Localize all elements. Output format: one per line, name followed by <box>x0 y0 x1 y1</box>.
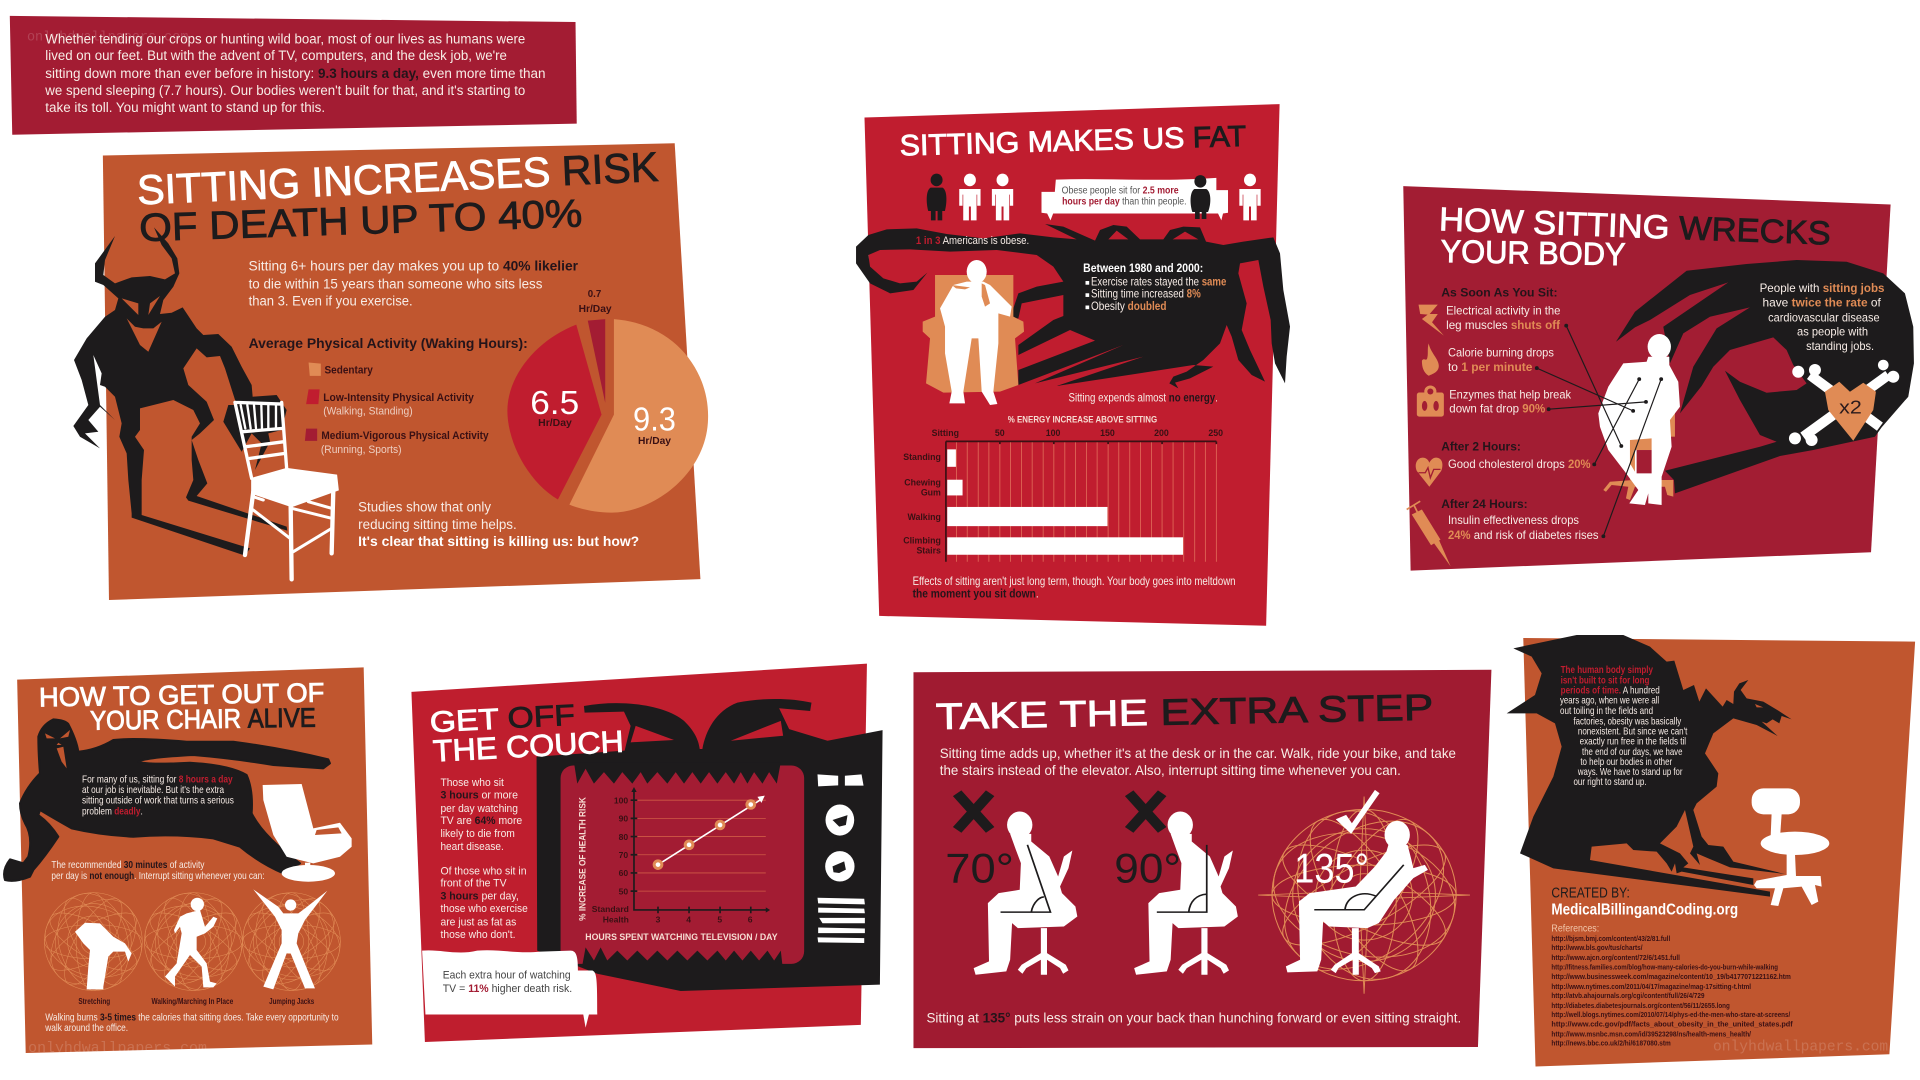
pie chart: Hr/Day <box>579 304 612 315</box>
legend: (Walking, Standing) <box>323 406 413 418</box>
text: human body: isn't built to sit for long <box>1561 675 1649 686</box>
bar chart: energy increase: Standing <box>903 452 941 462</box>
degree labels: 135° <box>1294 844 1369 891</box>
text: sitting time adds up <box>940 745 1456 778</box>
text: as soon as you sit: to 1 per minute <box>1448 360 1533 374</box>
icon: jumping jack figure <box>233 883 350 1001</box>
text: three hours: Those who sit <box>440 777 504 789</box>
legend <box>305 362 489 456</box>
text: references: http://www.ajcn.org/content/72/6/1451.full <box>1551 953 1680 962</box>
title: chair alive <box>39 678 325 736</box>
text: created by: CREATED BY: <box>1551 886 1630 902</box>
text: thirty minutes: The recommended 30 minutes of activity <box>51 860 205 871</box>
line chart: health risk: Standard <box>592 904 629 914</box>
text: references: http://fitness.families.com/blog/how-many-calories-do-you-burn-while-walking <box>1551 963 1778 972</box>
text: as soon as you sit <box>1441 285 1572 416</box>
text: as soon as you sit: Calorie burning drops <box>1448 345 1554 359</box>
line chart: health risk: 90 <box>619 814 628 824</box>
legend: (Running, Sports) <box>321 444 402 456</box>
pie chart: Hr/Day <box>638 436 671 447</box>
title: risk of death: SITTING INCREASES RISK <box>136 143 659 213</box>
conclusion text: Studies show that only <box>358 499 491 514</box>
text: human body: periods of time. A hundred <box>1561 685 1660 696</box>
callout: white couch: Each extra hour of watching <box>443 969 571 981</box>
text: between 1980 and 2000: Exercise rates stayed the same <box>1091 276 1226 288</box>
legend: Medium-Vigorous Physical Activity <box>321 430 489 442</box>
line chart: health risk: HOURS SPENT WATCHING TELEVISION / DAY <box>585 932 778 942</box>
text: human body: years ago, when we were all <box>1560 696 1659 707</box>
line chart: health risk: 3 <box>656 915 661 925</box>
text: those who exercise: are just as fat as <box>440 917 516 929</box>
text: human body: the end of our days, we have <box>1582 747 1682 758</box>
text: human body: our right to stand up. <box>1573 777 1647 788</box>
intro text: sitting down more than ever before in history: 9.3 hours a day, even more time than <box>45 66 546 81</box>
icon: lightning bolt <box>1419 305 1444 336</box>
panel: how sitting wrecks your body <box>1403 186 1914 571</box>
text: references: http://diabetes.diabetesjournals.org/content/56/11/2655.long <box>1551 1001 1730 1010</box>
title: risk of death <box>136 143 659 250</box>
text: thirty minutes <box>51 860 264 882</box>
legend heading: Average Physical Activity (Waking Hours): <box>249 335 528 351</box>
figure: 70 degrees <box>974 812 1077 975</box>
icon: scale with feet <box>1417 385 1444 417</box>
text: references: http://www.msnbc.msn.com/id/39523298/ns/health-mens_health/ <box>1551 1029 1751 1038</box>
bar chart: energy increase: 100 <box>1046 428 1061 438</box>
icon: x mark 70 <box>957 793 990 830</box>
text: after two hours: Good cholesterol drops 20% <box>1448 457 1591 471</box>
intro text: Whether tending our crops or hunting wild boar, most of our lives as humans were <box>45 31 526 46</box>
exercise labels <box>78 996 314 1006</box>
exercise labels: Walking/Marching In Place <box>151 996 233 1006</box>
title: makes us fat: SITTING MAKES US FAT <box>899 120 1247 163</box>
illustration: sitting man and chair <box>1598 334 1680 505</box>
text: references: http://bjsm.bmj.com/content/43/2/81.full <box>1551 934 1670 943</box>
icon: syringe <box>1407 501 1451 566</box>
illustration: white chair <box>235 402 338 579</box>
text: sitting jobs: standing jobs. <box>1806 339 1874 353</box>
line chart: health risk: 50 <box>619 886 628 896</box>
title: extra step: TAKE THE EXTRA STEP <box>935 687 1434 737</box>
text: sitting time adds up: the stairs instead of the elevator. Also, interrupt sitting time whenever you can. <box>940 762 1401 778</box>
text: eight hours a day: sitting outside of work that turns a serious <box>82 795 234 806</box>
text: thirty minutes: per day is not enough. Interrupt sitting whenever you can: <box>51 871 264 882</box>
text: sitting jobs <box>1760 281 1885 353</box>
text: those who exercise: 3 hours per day, <box>440 890 519 902</box>
text: after 24 hours: 24% and risk of diabetes rises <box>1448 528 1599 542</box>
icon: check mark <box>1336 790 1380 834</box>
conclusion text <box>358 499 639 549</box>
text: created by: MedicalBillingandCoding.org <box>1551 901 1738 918</box>
text: eight hours a day: problem deadly. <box>82 806 143 817</box>
text: three hours: TV are 64% more <box>440 815 522 827</box>
text: human body: nonexistent. But since we can't <box>1578 727 1688 738</box>
degree labels <box>945 844 1369 891</box>
panel: get off the couch <box>411 664 883 1042</box>
text: references: References: <box>1551 923 1599 934</box>
icon: crossbones heart <box>1789 360 1899 446</box>
body text: sitting six hours: to die within 15 years than someone who sits less <box>249 276 543 291</box>
text: as soon as you sit: down fat drop 90% <box>1449 402 1545 416</box>
text: human body: exactly run free in the fields til <box>1580 736 1686 747</box>
text: x2: x2 <box>1839 396 1862 417</box>
watermark top: onlyhdwallpapers.com <box>27 30 188 45</box>
text: those who exercise: Of those who sit in <box>440 865 527 877</box>
text: sitting time adds up: Sitting time adds up, whether it's at the desk or in the car. Walk, ride your bike, and take <box>940 745 1456 761</box>
bar chart: energy increase: Climbing <box>903 536 941 546</box>
exercise labels: Jumping Jacks <box>269 996 314 1006</box>
bar chart: energy increase: 50 <box>995 428 1005 438</box>
line chart: health risk: 70 <box>619 850 628 860</box>
watermark right: onlyhdwallpapers.com <box>1713 1040 1888 1056</box>
title: get off the couch <box>429 699 625 769</box>
pie chart: Hr/Day <box>538 418 572 429</box>
watermark left: onlyhdwallpapers.com <box>28 1041 207 1057</box>
text: human body: to help our bodies in other <box>1580 757 1673 768</box>
text: eight hours a day: For many of us, sitting for 8 hours a day <box>82 774 233 785</box>
text: one in three: 1 in 3 Americans is obese. <box>916 235 1029 247</box>
bar chart: energy increase: % ENERGY INCREASE ABOVE SITTING <box>1008 414 1157 424</box>
text: references: http://atvb.ahajournals.org/cgi/content/full/26/4/729 <box>1551 991 1704 1000</box>
text: after two hours: After 2 Hours: <box>1441 440 1521 454</box>
illustration: man in armchair <box>923 260 1024 405</box>
panel: sitting increases risk of death <box>73 143 708 600</box>
line chart: health risk: 6 <box>748 915 753 925</box>
illustration: ghost shadow <box>4 719 330 881</box>
illustration: couch and people icons <box>927 174 1261 220</box>
text: between 1980 and 2000: Between 1980 and 2000: <box>1083 263 1203 275</box>
icon: x mark 90 <box>1129 793 1162 830</box>
title: chair alive: HOW TO GET OUT OF <box>39 678 325 713</box>
text: three hours: 3 hours or more <box>440 789 518 801</box>
text: those who exercise: those who don't. <box>440 929 516 941</box>
conclusion text: reducing sitting time helps. <box>358 517 517 532</box>
icon: walking figure <box>134 883 252 1001</box>
icon: flame <box>1422 343 1439 376</box>
conclusion text: It's clear that sitting is killing us: but how? <box>358 534 639 549</box>
text: three hours: likely to die from <box>440 828 515 840</box>
bar chart: energy increase: 200 <box>1154 428 1169 438</box>
text: sitting jobs: as people with <box>1797 325 1868 339</box>
bar chart: energy increase: Gum <box>921 487 941 497</box>
line chart: health risk: % INCREASE OF HEALTH RISK <box>577 797 587 921</box>
text: as soon as you sit: Enzymes that help break <box>1449 388 1572 402</box>
text: references: http://www.nytimes.com/2011/04/17/magazine/mag-17sitting-t.html <box>1551 982 1751 991</box>
text: effects of sitting <box>913 575 1236 600</box>
legend: Low-Intensity Physical Activity <box>323 392 475 404</box>
degree labels: 90° <box>1114 844 1181 891</box>
text: eight hours a day <box>82 774 234 817</box>
title: risk of death: OF DEATH UP TO 40% <box>138 193 583 250</box>
panel: take the extra step <box>913 670 1491 1048</box>
illustration: office chair <box>1752 788 1829 906</box>
text: effects of sitting: the moment you sit down. <box>913 587 1039 600</box>
text: as soon as you sit: Electrical activity in the <box>1446 304 1561 318</box>
text: references: http://www.bls.gov/tus/charts/ <box>1551 943 1643 952</box>
text: references: http://www.businessweek.com/magazine/content/10_19/b4177071221162.htm <box>1551 972 1791 981</box>
title: get off the couch: THE COUCH <box>432 725 625 769</box>
pie chart <box>507 289 708 513</box>
line chart: health risk: Health <box>603 915 629 925</box>
bar chart: energy increase: Chewing <box>904 478 941 488</box>
text: references: http://well.blogs.nytimes.com/2010/07/14/phys-ed-the-men-who-stare-at-screens/ <box>1551 1010 1790 1019</box>
illustration: white reclining chair <box>263 784 352 882</box>
pie chart: 0.7 <box>588 289 601 300</box>
text: sitting jobs: People with sitting jobs <box>1760 281 1885 295</box>
text: those who exercise: those who exercise <box>440 903 528 915</box>
intro text: lived on our feet. But with the advent of TV, computers, and the desk job, we're <box>45 48 507 63</box>
text: created by <box>1551 886 1738 918</box>
text: references: http://www.cdc.gov/pdf/facts_about_obesity_in_the_united_states.pdf <box>1551 1020 1793 1029</box>
text: references <box>1551 923 1793 1048</box>
text: eight hours a day: at our job is inevitable. But it's the extra <box>82 785 225 796</box>
illustration: shadow hand <box>1616 260 1914 493</box>
bar chart: energy increase: 250 <box>1208 428 1223 438</box>
illustration: spider shadow <box>856 224 1290 388</box>
title: wrecks your body: YOUR BODY <box>1440 233 1626 272</box>
illustration: dragon shadow <box>1507 635 1792 897</box>
panel: how to get out of your chair alive <box>4 667 372 1057</box>
text: sitting jobs: have twice the rate of <box>1763 296 1881 310</box>
text: between 1980 and 2000: Obesity doubled <box>1091 301 1166 313</box>
line chart: health risk: 4 <box>686 915 691 925</box>
text: human body: factories, obesity was basically <box>1573 716 1681 727</box>
bar chart: energy increase: Walking <box>907 512 941 522</box>
text: after 24 hours <box>1441 497 1599 542</box>
panel: intro <box>10 16 577 135</box>
exercise labels: Stretching <box>78 996 110 1006</box>
bar chart: energy increase <box>903 414 1223 562</box>
text: as soon as you sit: leg muscles shuts off <box>1446 318 1561 332</box>
bar chart: energy increase: Stairs <box>916 545 941 555</box>
icon: stretching figure <box>34 883 152 1001</box>
line chart: health risk: 100 <box>614 795 628 805</box>
line chart: health risk: 80 <box>619 832 628 842</box>
intro text <box>44 31 546 115</box>
text: sitting at 135: Sitting at 135° puts less strain on your back than hunching forward or even sitting straight. <box>926 1010 1461 1025</box>
pie chart: 9.3 <box>633 401 676 438</box>
icon: spirograph <box>1253 792 1475 998</box>
panel: sitting makes us fat <box>856 104 1290 626</box>
text: after two hours <box>1441 440 1591 471</box>
text: those who exercise <box>440 865 528 941</box>
text: as soon as you sit: As Soon As You Sit: <box>1441 285 1558 299</box>
line chart: health risk: 5 <box>717 915 722 925</box>
couch text: Obese people sit for 2.5 more <box>1062 185 1179 196</box>
text: between 1980 and 2000 <box>1083 263 1226 313</box>
text: after 24 hours: Insulin effectiveness drops <box>1448 513 1579 527</box>
figure: 90 degrees <box>1134 812 1238 975</box>
illustration: devil shadow <box>73 227 287 556</box>
panel: dragon and credits <box>1507 635 1915 1067</box>
intro text: take its toll. You might want to stand up for this. <box>45 100 325 115</box>
text: three hours: heart disease. <box>440 841 504 853</box>
text: references: http://news.bbc.co.uk/2/hi/6187080.stm <box>1551 1039 1671 1048</box>
line chart: health risk: 60 <box>619 868 628 878</box>
text: human body: The human body simply <box>1561 665 1654 676</box>
title: get off the couch: GET OFF <box>429 699 576 739</box>
line chart: health risk <box>577 787 778 942</box>
text: walking burns: walk around the office. <box>44 1023 128 1034</box>
text: after 24 hours: After 24 Hours: <box>1441 497 1528 511</box>
text: sitting jobs: cardiovascular disease <box>1768 310 1880 324</box>
bar chart: energy increase: 150 <box>1100 428 1115 438</box>
body text: sitting six hours: Sitting 6+ hours per day makes you up to 40% likelier <box>249 259 579 274</box>
callout: white couch: TV = 11% higher death risk. <box>443 983 572 995</box>
title: chair alive: YOUR CHAIR ALIVE <box>90 703 316 736</box>
icon: heart with pulse <box>1416 458 1442 487</box>
pointer lines <box>1535 324 1663 538</box>
text: three hours <box>440 777 522 853</box>
illustration: tv monster <box>537 699 883 991</box>
text: human body: ways. We have to stand up for <box>1577 767 1683 778</box>
text: walking burns: Walking burns 3-5 times the calories that sitting does. Take every opportunity to <box>45 1012 339 1023</box>
degree labels: 70° <box>945 844 1014 891</box>
text: those who exercise: front of the TV <box>440 878 507 890</box>
pie chart: 6.5 <box>530 385 579 422</box>
body text: sitting six hours <box>249 259 579 309</box>
legend: Sedentary <box>324 364 374 376</box>
text: human body: out toiling in the fields and <box>1560 706 1653 717</box>
text: effects of sitting: Effects of sitting aren't just long term, though. Your body goes into meltdown <box>913 575 1236 588</box>
text: no energy: Sitting expends almost no energy. <box>1068 392 1218 405</box>
title: wrecks your body: HOW SITTING WRECKS <box>1438 201 1831 253</box>
couch text: hours per day than thin people. <box>1062 196 1187 207</box>
text: walking burns <box>44 1012 339 1034</box>
figure: 135 degrees <box>1286 821 1428 975</box>
text: between 1980 and 2000: Sitting time increased 8% <box>1091 289 1201 301</box>
callout: white couch <box>422 950 597 1028</box>
body text: sitting six hours: than 3. Even if you exercise. <box>249 294 413 309</box>
intro text: we spend sleeping (7.7 hours). Our bodies weren't built for that, and it's starting to <box>44 83 526 98</box>
text: three hours: per day watching <box>440 803 518 815</box>
bar chart: energy increase: Sitting <box>932 428 959 438</box>
text: human body <box>1560 665 1688 788</box>
couch text <box>1062 185 1187 207</box>
